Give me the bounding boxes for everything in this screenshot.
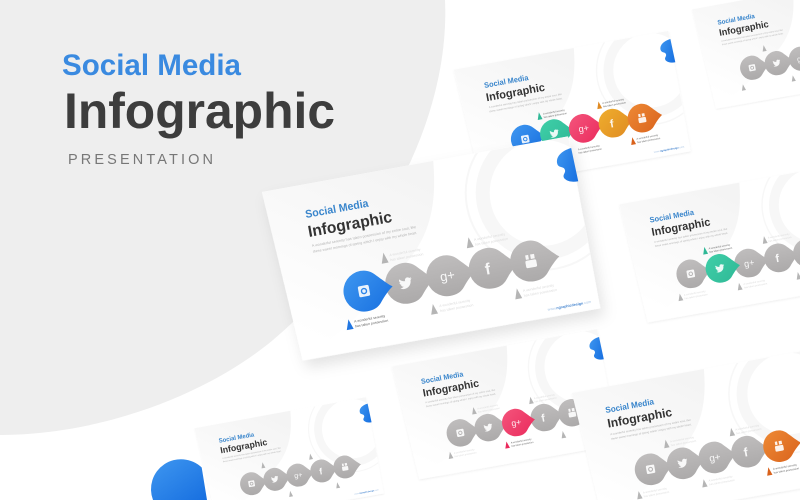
panel: slide bottom centre, pink google plus: A wonderful serenity has taken possession of my entire soul, like [425, 388, 496, 404]
panel: slide bottom centre, pink google plus: has taken possession [454, 451, 477, 458]
panel: slide middle right, green twitter: g+ [743, 257, 755, 269]
panel: slide middle right, green twitter: A wonderful serenity [768, 233, 790, 240]
subheading: Presentation: PRESENTATION [68, 152, 213, 168]
panel: slide bottom centre, pink google plus [420, 337, 604, 480]
panel: slide top centre, all colours: Infographic [485, 82, 546, 104]
panel: slide middle right, green twitter: has taken possession [768, 236, 792, 243]
panel: slide top centre, all colours [484, 39, 690, 172]
panel: slide bottom centre, pink google plus: has taken possession [478, 407, 501, 414]
panel: slide middle right, green twitter: Social Media [649, 208, 695, 225]
panel: slide middle right, green twitter [649, 183, 800, 323]
panel: slide top centre, all colours: these sweet mornings of spring which I enjoy with my whole heart. [489, 97, 563, 113]
panel: slide bottom right, orange youtube: A wonderful serenity [773, 463, 798, 471]
panel: slide top centre, all colours: Social Media [483, 73, 530, 90]
panel: slide bottom right, orange youtube: A wonderful serenity has taken possession of my entire soul, like [610, 418, 692, 436]
panel: slide top centre, all colours: A wonderful serenity [602, 98, 625, 105]
panel: slide bottom centre, pink google plus: has taken possession [534, 396, 558, 403]
panel: slide bottom left, grey: A wonderful serenity has taken possession of my entire soul, like [222, 446, 282, 460]
panel: slide middle right, green twitter: A wonderful serenity [743, 279, 766, 286]
panel: slide top centre, all colours: has taken possession [637, 137, 661, 144]
panel: slide bottom right, orange youtube: f [743, 445, 750, 460]
panel: slide top centre, all colours: f [609, 118, 615, 131]
panel: main slide, blue instagram: has taken possession [390, 252, 424, 262]
panel: slide top centre, all colours: A wonderful serenity has taken possession of my entire soul, like [489, 93, 563, 109]
panel: main slide, blue instagram: A wonderful serenity [354, 314, 386, 324]
panel: slide bottom right, orange youtube: has taken possession [709, 478, 736, 486]
panel: slide bottom right, orange youtube: Social Media [604, 396, 655, 415]
panel: slide bottom right, orange youtube: g+ [708, 452, 722, 465]
panel: slide top centre, all colours: A wonderful serenity [578, 144, 601, 151]
panel: main slide, blue instagram: g+ [439, 267, 456, 284]
panel: main slide, blue instagram: has taken possession [523, 288, 557, 298]
panel: slide bottom centre, pink google plus: Infographic [422, 378, 480, 400]
panel: slide bottom left, grey: Social Media [218, 431, 255, 445]
panel: slide bottom centre, pink google plus: A wonderful serenity [477, 404, 499, 410]
panel: slide bottom left, grey: these sweet mornings of spring which I enjoy with my whole heart. [223, 450, 282, 463]
panel: main slide, blue instagram: has taken possession [475, 237, 508, 247]
panel: slide bottom centre, pink google plus: Social Media [420, 369, 465, 386]
panel: slide middle right, green twitter: A wonderful serenity [684, 290, 707, 297]
panel: slide top right: A wonderful serenity has taken possession of my entire soul, like [721, 28, 784, 43]
panel: slide middle right, green twitter: has taken possession [709, 247, 733, 254]
panel: slide bottom right, orange youtube: A wonderful serenity [735, 423, 760, 432]
panel: slide bottom right, orange youtube: has taken possession [773, 466, 800, 475]
panel: slide bottom centre, pink google plus: A wonderful serenity [454, 448, 476, 455]
panel: main slide, blue instagram: A wonderful serenity [474, 232, 506, 242]
panel: slide bottom left, grey: g+ [293, 470, 303, 480]
panel: slide bottom right, orange youtube: these sweet mornings of spring which I enjoy with my whole heart. [611, 422, 692, 441]
panel: slide bottom right, orange youtube: A wonderful serenity [670, 435, 695, 443]
panel: slide bottom left, grey: f [318, 466, 323, 477]
panel: main slide, blue instagram: A wonderful serenity has taken possession of my entire soul, like [312, 225, 417, 248]
panel: slide top centre, all colours: A wonderful serenity [636, 134, 659, 141]
panel: slide bottom centre, pink google plus: these sweet mornings of spring which I enjoy with my whole heart. [426, 392, 497, 408]
panel: main slide, blue instagram: has taken possession [440, 303, 474, 313]
panel: slide top right: Infographic [718, 18, 769, 38]
panel: slide middle right, green twitter: f [775, 253, 781, 265]
panel: slide bottom centre, pink google plus: f [540, 412, 546, 425]
background grey shape [0, 0, 445, 435]
panel: main slide, blue instagram: www.ngraphicdesign.com [547, 300, 591, 312]
panel: slide bottom left, grey: Infographic [219, 437, 268, 455]
panel: slide bottom left, grey [218, 404, 384, 500]
panel: slide top right [692, 0, 800, 111]
panel: slide bottom centre, pink google plus: g+ [510, 417, 522, 428]
panel: slide top centre, all colours: has taken possession [603, 101, 627, 108]
panel: main slide, blue instagram: A wonderful serenity [523, 283, 555, 293]
panel: slide middle right, green twitter: these sweet mornings of spring which I enjoy with my whole heart. [655, 232, 729, 248]
panel: slide top right: Social Media [717, 13, 756, 27]
panel: slide bottom right, orange youtube: A wonderful serenity [643, 486, 668, 495]
panel: main slide, blue instagram: these sweet mornings of spring which I enjoy with my whole heart. [313, 231, 418, 254]
panel: slide bottom centre, pink google plus: A wonderful serenity [534, 393, 556, 400]
panel: main slide, blue instagram: f [484, 261, 493, 279]
panel: slide top centre, all colours: www.ngraphicdesign.com [654, 145, 685, 154]
panel: slide bottom right, orange youtube: A wonderful serenity [708, 474, 733, 483]
panel: slide middle right, green twitter: Infographic [651, 216, 711, 239]
heading: Social Media: Social Media [62, 49, 241, 82]
panel: slide top centre, all colours: A wonderful serenity [543, 109, 566, 116]
panel: slide bottom centre, pink google plus: A wonderful serenity [511, 438, 533, 445]
panel: slide middle right, green twitter: has taken possession [744, 282, 768, 289]
panel: slide bottom right, orange youtube: has taken possession [670, 439, 697, 447]
panel: slide bottom right, orange youtube: has taken possession [643, 490, 670, 498]
panel: main slide, blue instagram: A wonderful serenity [439, 298, 471, 308]
panel: main slide, blue instagram: has taken possession [355, 319, 389, 329]
panel: slide middle right, green twitter: A wonderful serenity has taken possession of my entire soul, like [654, 228, 728, 244]
panel: slide top centre, all colours: has taken possession [578, 148, 603, 155]
decorative blue circle, bottom left [151, 459, 207, 500]
panel: slide bottom right, orange youtube: Infographic [606, 405, 673, 431]
panel: main slide, blue instagram: A wonderful serenity [389, 248, 421, 257]
panel: slide bottom right, orange youtube [574, 369, 800, 500]
panel: main slide, blue instagram: Infographic [307, 209, 393, 241]
panel: slide middle right, green twitter: has taken possession [684, 293, 709, 300]
panel: slide top centre, all colours: has taken possession [543, 112, 568, 119]
heading: Infographic: Infographic [64, 83, 335, 139]
panel: slide top centre, all colours: g+ [578, 123, 590, 134]
panel: slide bottom right, orange youtube: has taken possession [736, 427, 762, 435]
panel: slide bottom centre, pink google plus: has taken possession [511, 441, 534, 448]
panel: slide bottom left, grey: www.ngraphicdesign.com [354, 489, 379, 496]
panel: main slide, blue instagram: Social Media [304, 198, 370, 221]
panel: slide top right: these sweet mornings of spring which I enjoy with my whole heart. [722, 32, 784, 46]
panel: slide middle right, green twitter: A wonderful serenity [708, 243, 731, 250]
panel: main slide, blue instagram [262, 136, 606, 370]
